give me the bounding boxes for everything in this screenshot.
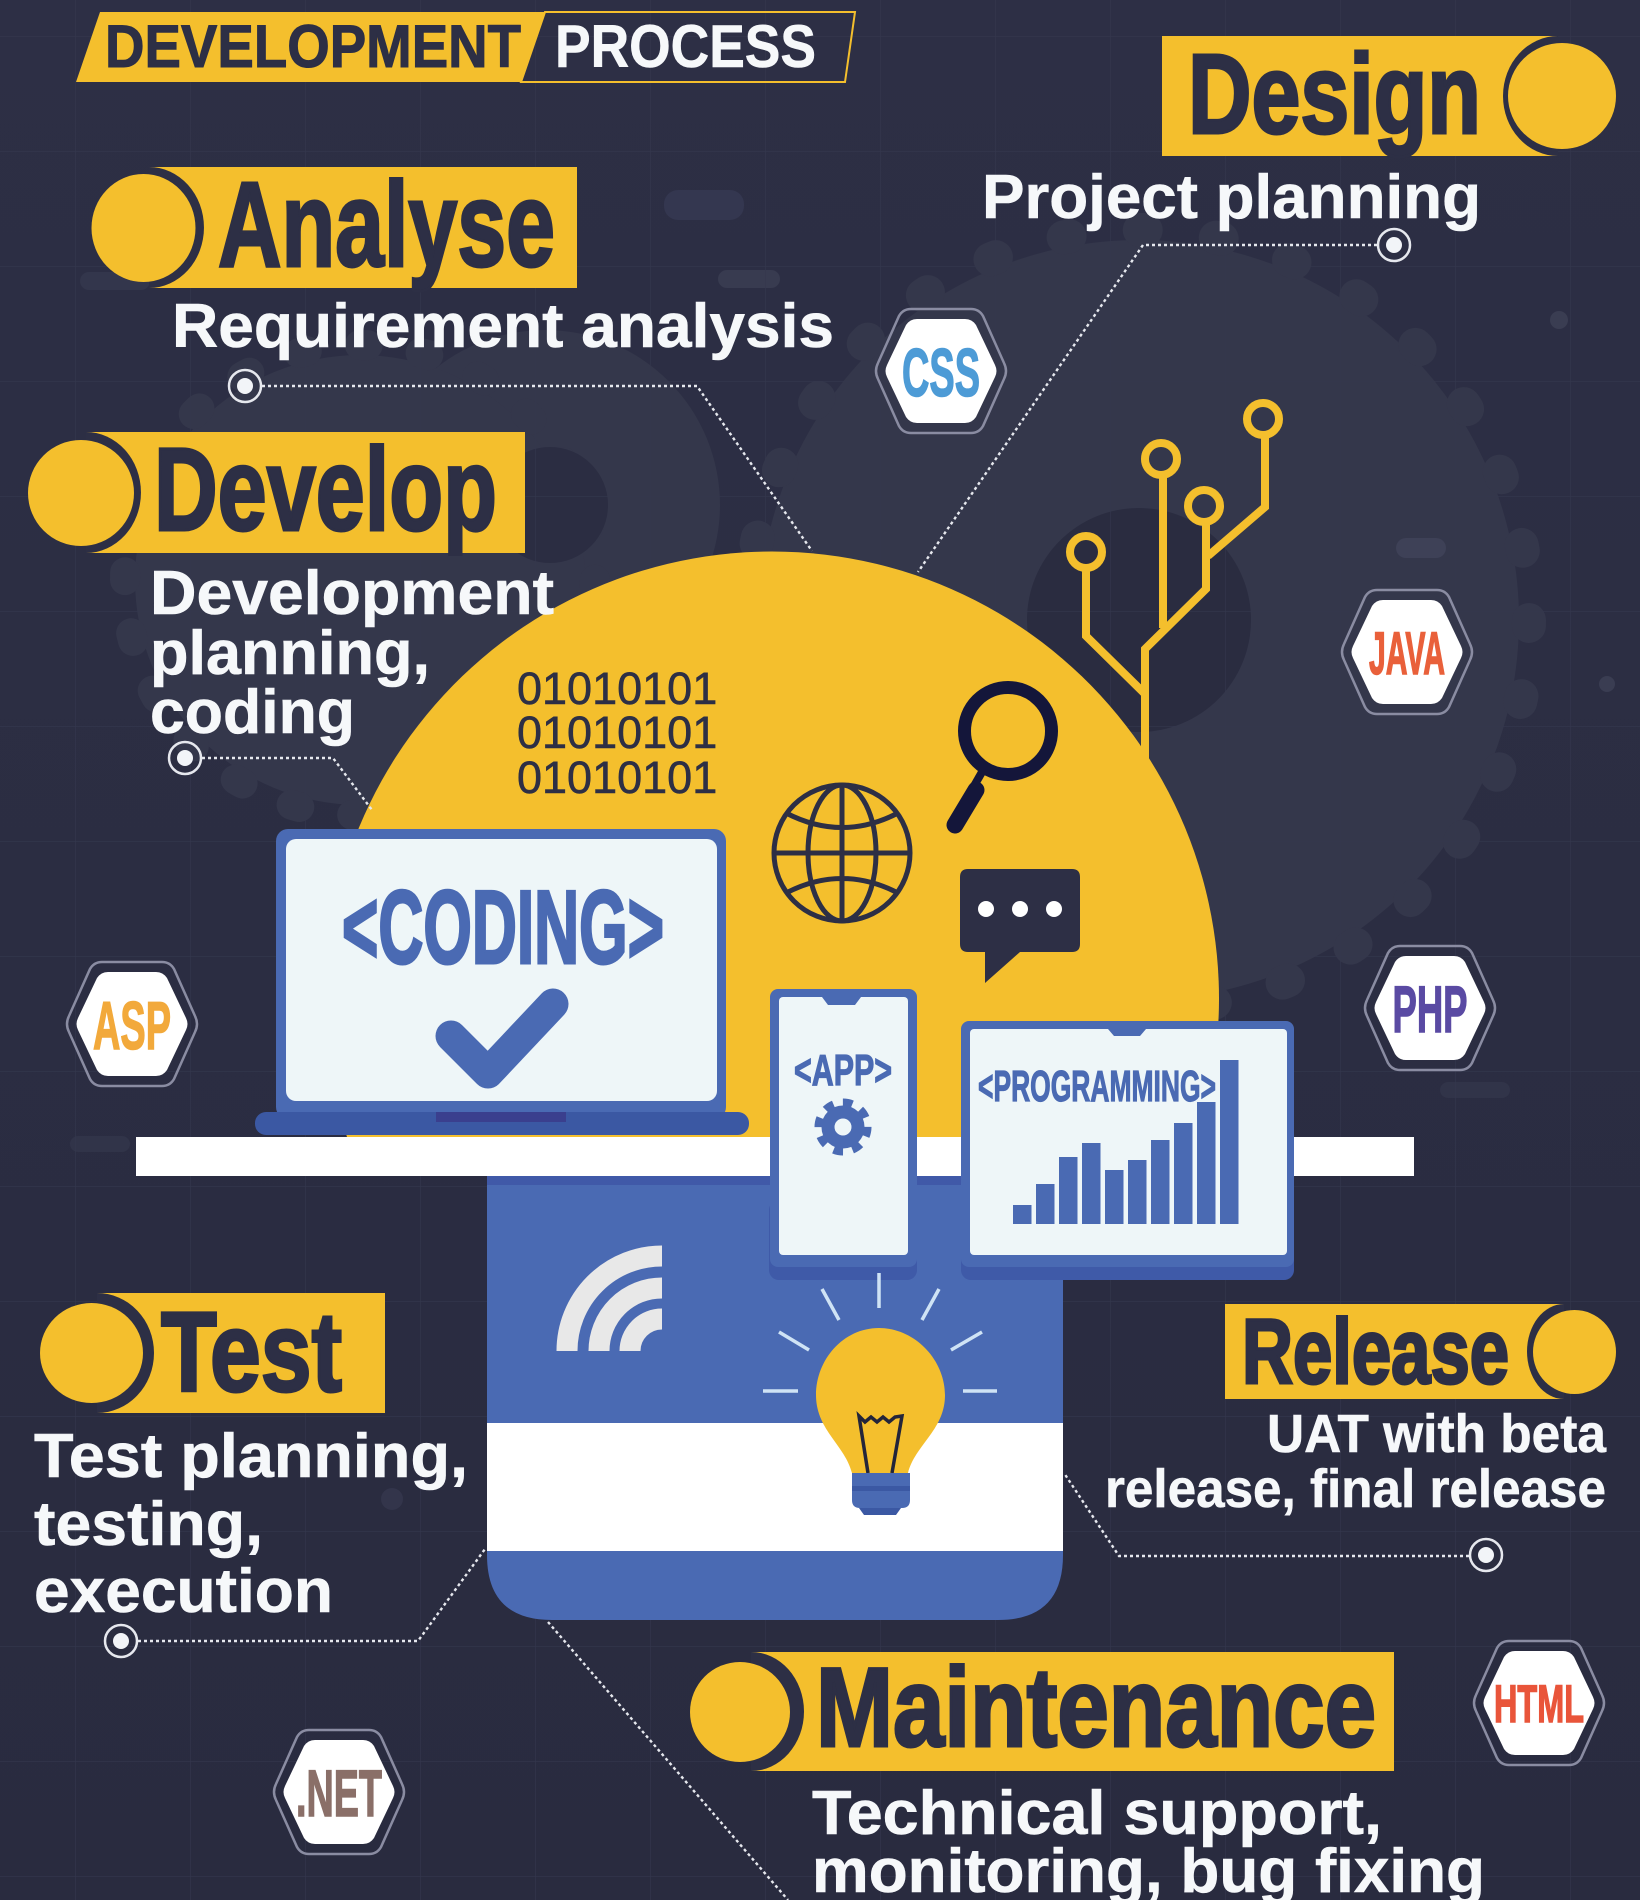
badge: CSS: CSS — [902, 335, 980, 411]
badge: CSS — [876, 309, 1006, 433]
bar chart — [1013, 1060, 1238, 1224]
text: UAT with beta release, final release: UAT with beta — [1267, 1404, 1607, 1464]
badge: JAVA: JAVA — [1369, 620, 1445, 687]
laptop: coding: <CODING> — [342, 870, 664, 986]
badge: PHP — [1365, 946, 1495, 1070]
text: Test planning, testing, execution — [34, 1422, 468, 1626]
leader line end points — [105, 229, 1502, 1657]
text: Project planning: Project planning — [982, 163, 1481, 232]
binary digits: 01010101 — [517, 707, 717, 758]
binary digits: 01010101 — [517, 752, 717, 803]
badge: .NET — [274, 1730, 404, 1854]
badge: ASP: ASP — [93, 988, 171, 1064]
title banner — [76, 12, 855, 82]
badge: ASP — [67, 962, 197, 1086]
icon: gear — [819, 1103, 867, 1151]
text: UAT with beta release, final release: release, final release — [1105, 1459, 1606, 1519]
phone: app — [769, 989, 917, 1280]
badge: HTML: HTML — [1494, 1675, 1584, 1734]
icon: light bulb — [763, 1273, 997, 1515]
blue base panel — [487, 1176, 1063, 1620]
icon: globe — [774, 785, 910, 921]
shelf — [136, 1137, 1414, 1176]
text: Test planning, testing, execution: Test planning, — [34, 1422, 468, 1491]
text: Development planning, coding: coding — [150, 678, 355, 747]
text: Development planning, coding — [150, 559, 554, 747]
binary digits — [517, 663, 717, 803]
text: Test planning, testing, execution: testing, — [34, 1490, 263, 1559]
badge: JAVA — [1342, 590, 1472, 714]
heading: Test — [40, 1289, 385, 1415]
text: Requirement analysis: Requirement analysis — [172, 292, 834, 361]
laptop: coding — [255, 829, 749, 1135]
tablet: programming chart — [961, 1021, 1294, 1280]
heading: Develop — [28, 424, 525, 556]
heading: Analyse: Analyse — [218, 156, 555, 292]
heading: Release: Release — [1242, 1301, 1509, 1403]
text: Development planning, coding: planning, — [150, 619, 430, 688]
text: Technical support, monitoring, bug fixing — [812, 1779, 1485, 1900]
text: Development planning, coding: Development — [150, 559, 554, 628]
heading: Develop: Develop — [154, 424, 497, 556]
binary digits: 01010101 — [517, 663, 717, 714]
title banner: DEVELOPMENT — [105, 13, 521, 80]
icon: wifi — [567, 1256, 662, 1351]
icon: magnifier — [955, 688, 1052, 825]
icon: chat bubble — [960, 869, 1080, 983]
text: UAT with beta release, final release — [1105, 1404, 1607, 1519]
icon: circuit tree — [1070, 403, 1279, 760]
heading: Test: Test — [161, 1289, 342, 1415]
heading: Analyse — [92, 156, 577, 292]
heading: Design: Design — [1188, 31, 1481, 157]
text: Technical support, monitoring, bug fixing: Technical support, — [812, 1779, 1382, 1848]
tablet: programming chart: <PROGRAMMING> — [978, 1062, 1216, 1111]
title banner: PROCESS — [555, 13, 816, 80]
heading: Maintenance: Maintenance — [816, 1645, 1376, 1770]
phone: app: <APP> — [794, 1046, 892, 1095]
badge: .NET: .NET — [296, 1756, 382, 1830]
central yellow dome — [325, 551, 1219, 1137]
text: Test planning, testing, execution: execution — [34, 1557, 333, 1626]
leader lines — [138, 245, 1469, 1900]
badge: HTML — [1474, 1641, 1604, 1765]
badge: PHP: PHP — [1392, 972, 1468, 1046]
